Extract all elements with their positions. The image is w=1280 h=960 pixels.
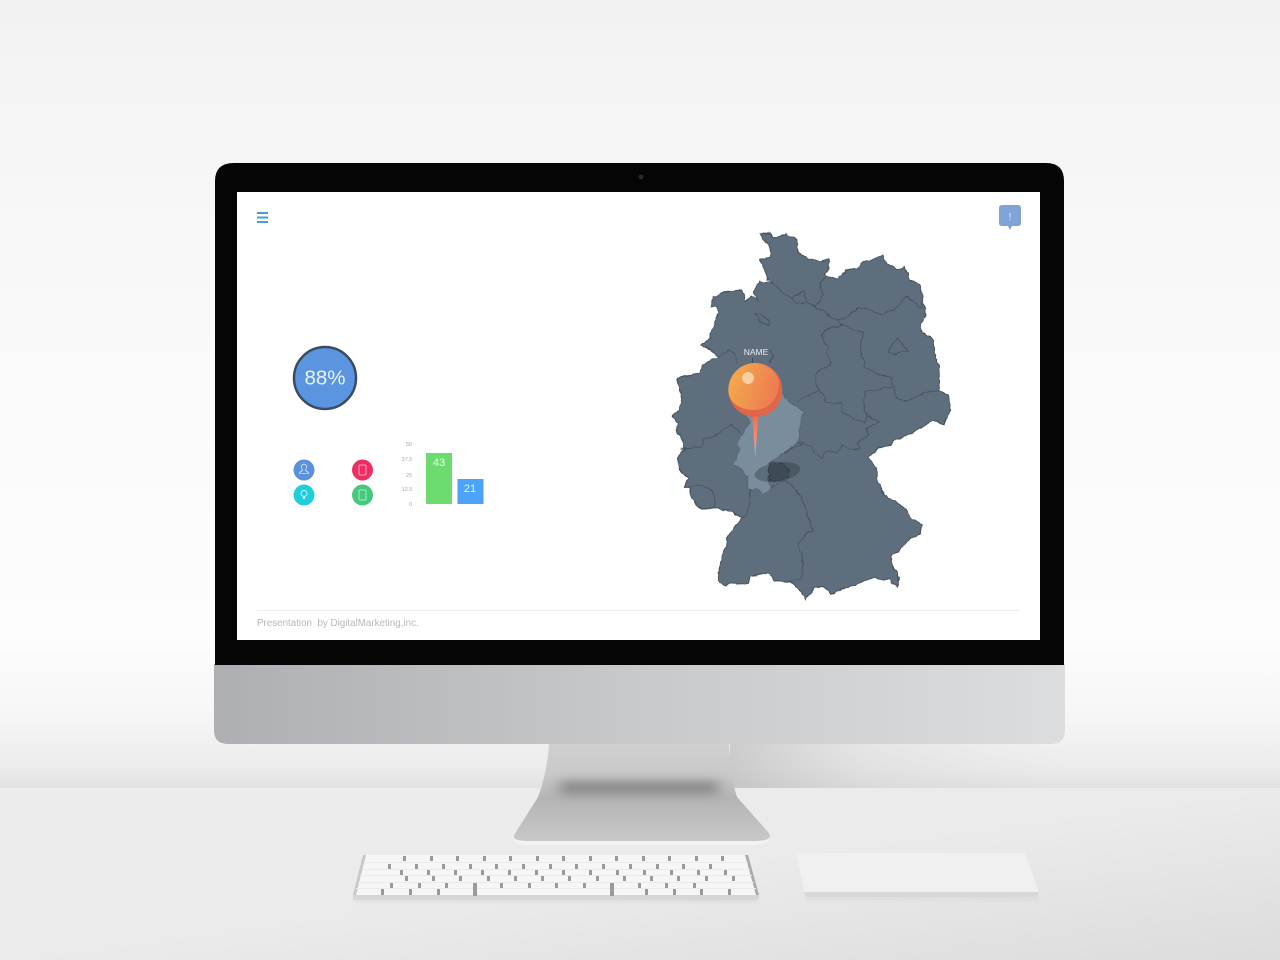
pin head	[728, 363, 782, 417]
map: region borders	[682, 277, 939, 582]
pin needle	[752, 412, 758, 457]
progress circle: 88%: 88%	[304, 366, 346, 390]
progress circle: 88%	[294, 347, 356, 409]
bar chart	[402, 442, 484, 508]
keyboard row lines	[356, 862, 756, 889]
icon: phone on pink circle	[352, 460, 373, 480]
bar: 43: 43	[433, 457, 445, 469]
map pin with label	[728, 347, 802, 485]
screen	[237, 192, 1040, 640]
trackpad	[797, 853, 1038, 900]
icon: hamburger menu	[257, 212, 268, 223]
monitor bezel	[215, 163, 1064, 665]
icon: notification bubble: !	[1009, 212, 1011, 223]
map: dark enclave	[768, 462, 789, 482]
icon: tablet on green circle	[352, 484, 373, 506]
monitor chin	[214, 664, 1065, 744]
map: country regions	[673, 233, 951, 599]
chart axis labels: 37.5	[402, 457, 412, 463]
map of Germany	[673, 233, 951, 599]
chart axis labels: 25	[406, 473, 412, 479]
chart axis labels: 12.5	[402, 487, 412, 493]
chart axis labels: 50	[406, 442, 412, 448]
icon: notification bubble	[999, 205, 1021, 230]
footer divider and credit: Presentation by DigitalMarketing,inc.	[257, 618, 419, 629]
bar: 21: 21	[464, 483, 476, 495]
chart axis labels: 0	[409, 502, 412, 508]
keyboard key gaps	[381, 856, 735, 896]
chart axis labels	[402, 442, 412, 508]
keyboard	[353, 855, 759, 902]
icon: person on blue circle	[294, 460, 314, 480]
icon: bulb on cyan circle	[294, 484, 314, 506]
pin shadow	[753, 459, 802, 485]
pin label: NAME	[744, 347, 769, 357]
map: Hesse highlighted region	[732, 377, 803, 495]
monitor stand	[513, 744, 770, 845]
